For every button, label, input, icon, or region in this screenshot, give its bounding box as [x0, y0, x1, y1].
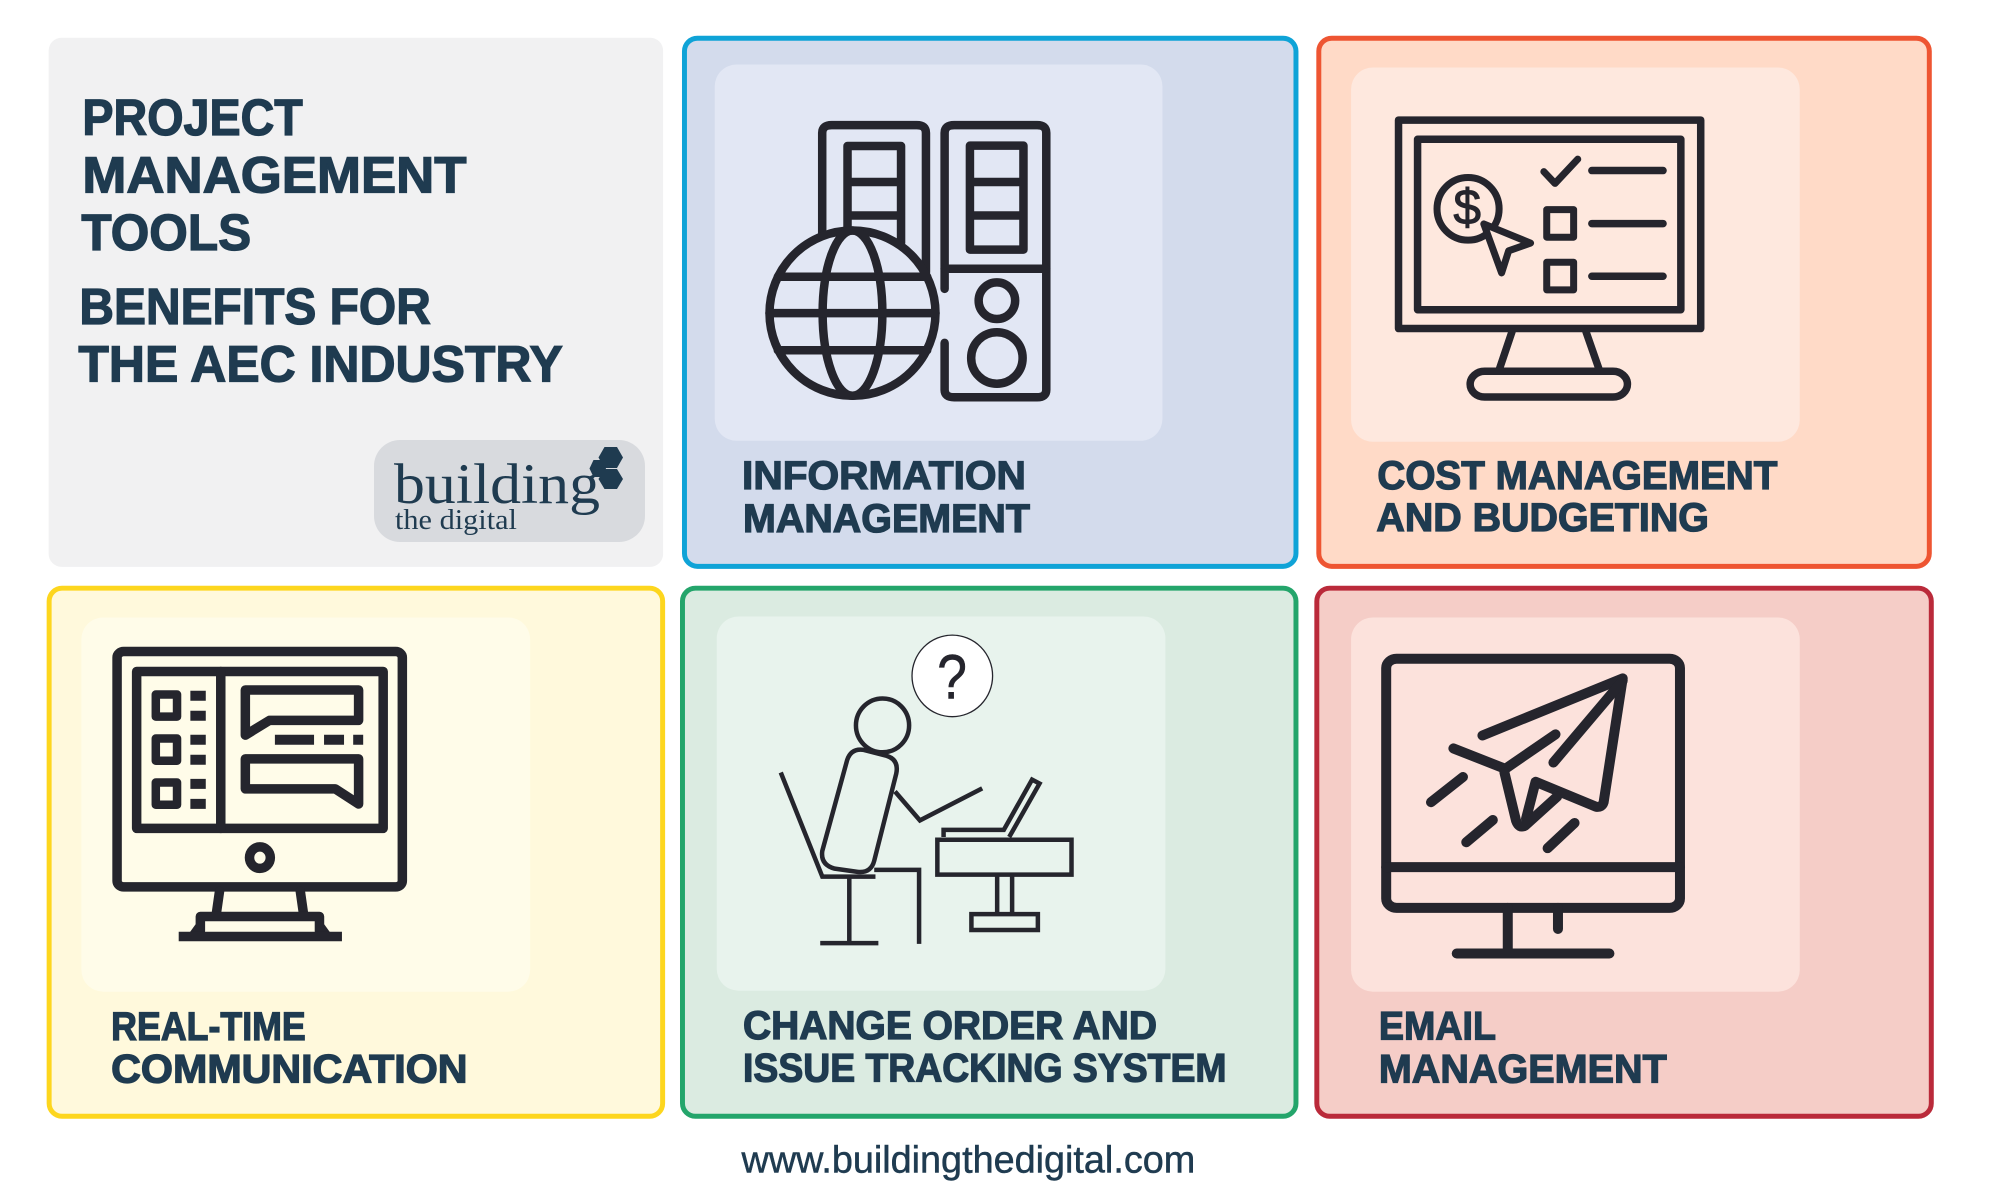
label: change order and issue tracking system: CHANGE ORDER AND — [743, 1004, 1157, 1048]
panel: title — [49, 38, 663, 567]
label: email management: EMAIL — [1379, 1004, 1496, 1048]
label: email management — [1379, 1004, 1667, 1092]
footer: website: www.buildingthedigital.com — [741, 1138, 1195, 1180]
icon: monitor with chat — [117, 652, 402, 936]
logo: building the digital — [374, 440, 645, 542]
heading: project management tools: TOOLS — [81, 204, 251, 261]
heading: project management tools: MANAGEMENT — [82, 147, 467, 204]
panel: information management — [684, 38, 1296, 566]
panel: cost management and budgeting — [1319, 38, 1929, 566]
icon: dollar sign: $ — [1453, 179, 1481, 235]
label: real-time communication — [111, 1005, 468, 1092]
panel: change order and issue tracking system — [682, 588, 1296, 1116]
subheading: benefits for the AEC industry: BENEFITS FOR — [79, 278, 431, 335]
label: cost management and budgeting: AND BUDGETING — [1376, 496, 1709, 540]
label: cost management and budgeting: COST MANAGEMENT — [1377, 454, 1777, 498]
label: email management: MANAGEMENT — [1379, 1048, 1667, 1092]
label: real-time communication: REAL-TIME — [111, 1005, 306, 1049]
heading: project management tools: PROJECT — [82, 89, 303, 146]
icon: monitor with budget checklist — [1399, 120, 1701, 397]
label: cost management and budgeting — [1376, 454, 1777, 540]
icon: person at laptop with question: ? — [937, 642, 967, 713]
label: real-time communication: COMMUNICATION — [111, 1048, 468, 1092]
logo: building the digital: the digital — [395, 505, 517, 536]
label: change order and issue tracking system: ISSUE TRACKING SYSTEM — [743, 1047, 1226, 1091]
label: change order and issue tracking system — [743, 1004, 1226, 1091]
icon: binders and globe — [770, 125, 1046, 397]
label: information management: INFORMATION — [742, 454, 1026, 498]
icon: monitor with paper plane — [1386, 659, 1680, 953]
subheading: benefits for the AEC industry: THE AEC INDUSTRY — [78, 336, 563, 393]
heading: project management tools — [81, 89, 467, 261]
label: information management — [742, 454, 1030, 541]
panel: email management — [1317, 588, 1931, 1116]
icon: person at laptop with question — [781, 635, 1072, 944]
label: information management: MANAGEMENT — [743, 497, 1030, 541]
subheading: benefits for the AEC industry — [78, 278, 563, 393]
panel: real-time communication — [49, 588, 663, 1116]
logo: building the digital: building — [394, 453, 600, 516]
